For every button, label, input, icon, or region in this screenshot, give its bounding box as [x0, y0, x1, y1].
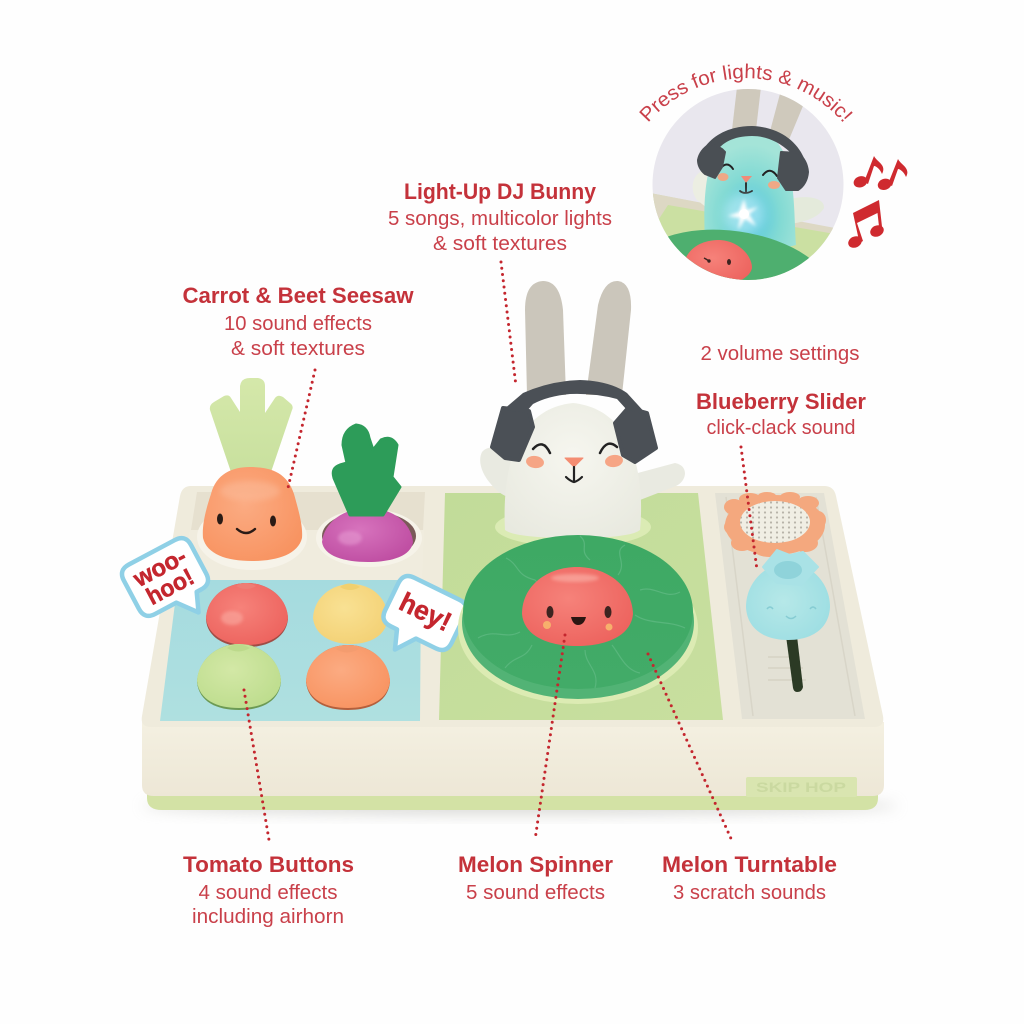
carrot body [203, 467, 302, 561]
turntable side [462, 545, 694, 699]
callout: carrot and beet seesaw [182, 283, 414, 360]
flower mesh [740, 501, 810, 543]
beet seesaw [316, 425, 422, 567]
callout: carrot and beet seesaw: Carrot & Beet Seesaw [182, 283, 414, 308]
leader lines [244, 262, 757, 843]
callout: melon turntable: Melon Turntable [662, 852, 837, 877]
callout: blueberry slider: Blueberry Slider [696, 389, 866, 414]
panel: turntable deck [439, 493, 723, 720]
icon: music note beamed [846, 200, 886, 250]
tomato: yellow [313, 584, 388, 644]
panel: veggie tray [191, 492, 425, 530]
carrot top [210, 378, 293, 475]
blueberry slider [746, 550, 830, 640]
sunflower speaker [724, 492, 826, 557]
tomato: orange [306, 645, 390, 710]
speech bubble: hey [372, 573, 470, 671]
beet leaves [333, 425, 400, 515]
speech bubble: hey: hey! [395, 587, 456, 637]
callout: blueberry slider [696, 389, 866, 439]
callout: light-up dj bunny: 5 songs, multicolor lights [388, 208, 612, 230]
callout: light-up dj bunny: Light-Up DJ Bunny [404, 179, 597, 204]
inset body [704, 130, 796, 252]
inset light glow [724, 194, 764, 234]
panel: tomato pad [160, 580, 421, 721]
callout: melon spinner: Melon Spinner [458, 852, 613, 877]
turntable rim [458, 552, 698, 704]
callout: tomato buttons: including airhorn [192, 906, 344, 928]
blueberry calyx [763, 550, 818, 585]
callout: light-up dj bunny: & soft textures [433, 233, 567, 255]
icon: music notes upper [852, 156, 907, 192]
callout: blueberry slider: click-clack sound [706, 417, 856, 439]
dj bunny [480, 281, 685, 547]
melon spinner dome [522, 567, 633, 646]
tomato buttons [197, 583, 390, 710]
board top surface [142, 486, 883, 727]
callout: melon turntable: 3 scratch sounds [673, 882, 826, 904]
carrot socket [197, 504, 307, 570]
logo plate [746, 777, 857, 797]
flower petals [724, 492, 826, 557]
speech bubble: woo-hoo: hoo! [142, 563, 199, 611]
speech bubble: woo-hoo [118, 534, 221, 636]
melon face [543, 606, 612, 630]
inset circle: lit bunny [652, 89, 844, 280]
bunny ears [525, 281, 631, 395]
bunny arms [480, 447, 512, 498]
callout: melon spinner: 5 sound effects [466, 882, 605, 904]
beet body [322, 508, 413, 562]
melon turntable [458, 535, 698, 704]
bunny body [505, 403, 641, 538]
callout: carrot and beet seesaw: & soft textures [231, 338, 365, 360]
callout: tomato buttons: 4 sound effects [198, 882, 338, 904]
bunny headphones [492, 380, 656, 462]
inset turntable [668, 230, 809, 280]
bunny socket [495, 507, 651, 547]
tomato: red [206, 583, 288, 647]
inset table [653, 194, 833, 280]
speech bubble: woo-hoo: woo- [128, 543, 191, 593]
blueberry face [767, 607, 816, 618]
carrot seesaw [197, 378, 307, 570]
callout: melon spinner [458, 852, 613, 904]
carrot face [217, 514, 276, 533]
board front face [142, 722, 884, 796]
inset arms [693, 172, 707, 206]
inset ears [732, 87, 803, 142]
bunny face [525, 444, 624, 482]
inset headphones [698, 126, 808, 190]
logo plate: SKIP HOP [756, 779, 846, 795]
callout: tomato buttons: Tomato Buttons [183, 852, 354, 877]
curved caption: press for lights and music: Press for lights & music! [639, 64, 853, 122]
inset melon [686, 240, 752, 280]
beet socket [316, 509, 422, 567]
callout: carrot and beet seesaw: 10 sound effects [224, 313, 372, 335]
inset background [652, 90, 844, 228]
callout: light-up dj bunny [388, 179, 612, 255]
slider slot [768, 636, 806, 692]
board base strip [147, 780, 878, 810]
callout: volume settings: 2 volume settings [700, 343, 860, 365]
toy board [142, 486, 898, 815]
panel: slider track [715, 493, 865, 719]
tomato: green [197, 644, 281, 710]
inset face [718, 164, 780, 193]
turntable disc [463, 535, 693, 689]
callout: melon turntable [662, 852, 837, 904]
turntable grooves [478, 536, 685, 688]
callout: tomato buttons [183, 852, 354, 928]
